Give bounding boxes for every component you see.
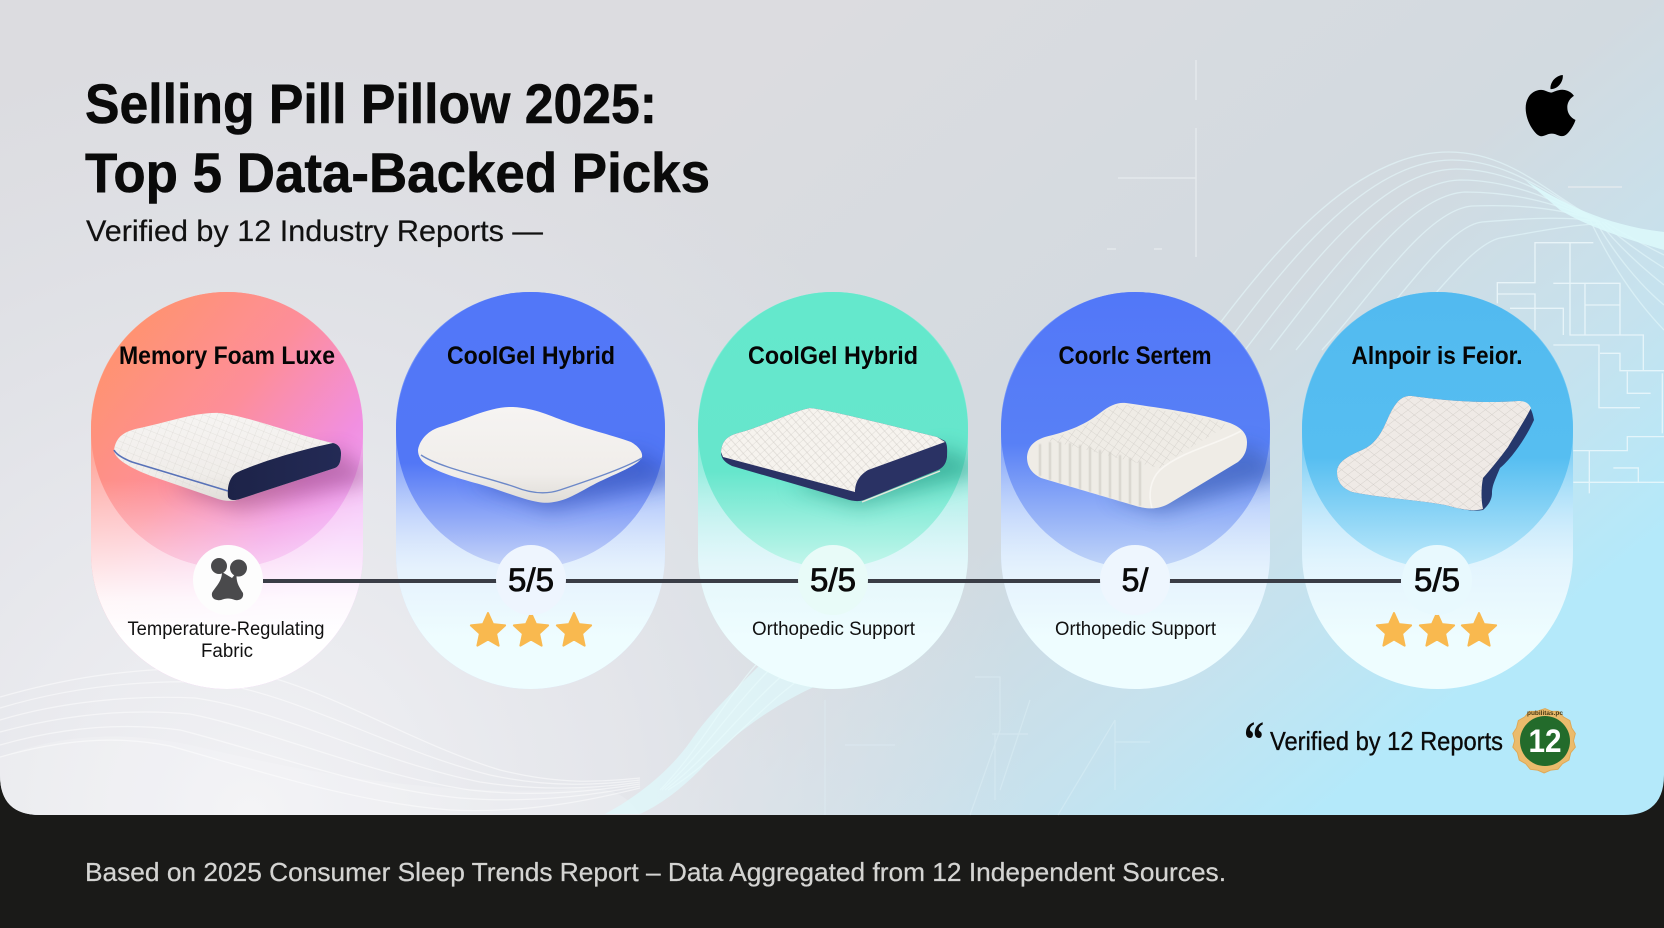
background wave light area [0, 736, 640, 815]
score node 3: 5/5 [810, 562, 856, 598]
connector line [263, 579, 1401, 583]
badge: 12 reports: pubilitas.pc [1527, 711, 1564, 717]
panel: Alnpoir is Feior [1302, 292, 1573, 689]
wave ribbon top right [1525, 180, 1664, 250]
feature label [128, 619, 324, 662]
icon: apple logo [1526, 75, 1576, 136]
score node 2: 5/5 [508, 562, 554, 598]
score node 3 [798, 545, 868, 615]
wave ribbon bottom centre [605, 660, 830, 814]
panel: CoolGel Hybrid green [698, 292, 985, 689]
feature label: Orthopedic Support [752, 619, 916, 640]
product name: CoolGel Hybrid [748, 342, 918, 370]
verified callout [1244, 712, 1503, 769]
verified callout: “ [1244, 712, 1264, 769]
subtitle: Verified by 12 Industry Reports — [86, 215, 543, 248]
badge: 12 reports [1513, 709, 1575, 773]
verified callout: Verified by 12 Reports [1270, 726, 1503, 756]
score node 4 [1100, 545, 1170, 615]
badge: 12 reports: 12 [1528, 723, 1562, 759]
faint circuit lines upper middle [1107, 60, 1622, 257]
pillow: coolgel [418, 407, 680, 510]
product name: CoolGel Hybrid [447, 342, 615, 370]
wave fan lines bottom centre [660, 655, 810, 790]
product name: Alnpoir is Feior. [1352, 342, 1522, 370]
rating stars [471, 613, 591, 646]
feature label: Fabric [201, 641, 253, 662]
pillow: cervical quilted [1337, 396, 1534, 511]
rating stars [1377, 613, 1496, 646]
faint circuit lines lower right [825, 677, 1150, 815]
score node 4: 5/ [1122, 562, 1148, 598]
title [85, 72, 710, 204]
footer source note: Based on 2025 Consumer Sleep Trends Report – Data Aggregated from 12 Independent Sources. [85, 857, 1226, 887]
score node 5: 5/5 [1414, 562, 1460, 598]
pillow: coolgel quilted [721, 408, 985, 506]
score node 5 [1402, 545, 1472, 615]
score node 1: icon [193, 545, 263, 615]
panel: CoolGel Hybrid blue [396, 292, 680, 689]
title: Top 5 Data-Backed Picks [85, 141, 710, 204]
score node 2 [496, 545, 566, 615]
feature label: Orthopedic Support [1055, 619, 1217, 640]
product name: Coorlc Sertem [1058, 342, 1212, 370]
wave lines top right [1200, 152, 1664, 350]
panel: Coorlc Sertem [1001, 292, 1285, 689]
pillow: contoured ribbed [1027, 403, 1285, 512]
title: Selling Pill Pillow 2025: [85, 72, 657, 135]
panel: Memory Foam Luxe [91, 292, 375, 689]
product name: Memory Foam Luxe [119, 342, 335, 370]
circuit lines right [1497, 243, 1664, 493]
pillow: memory foam [114, 413, 375, 510]
feature label: Temperature-Regulating [128, 619, 324, 640]
wave lines bottom left [0, 668, 640, 811]
